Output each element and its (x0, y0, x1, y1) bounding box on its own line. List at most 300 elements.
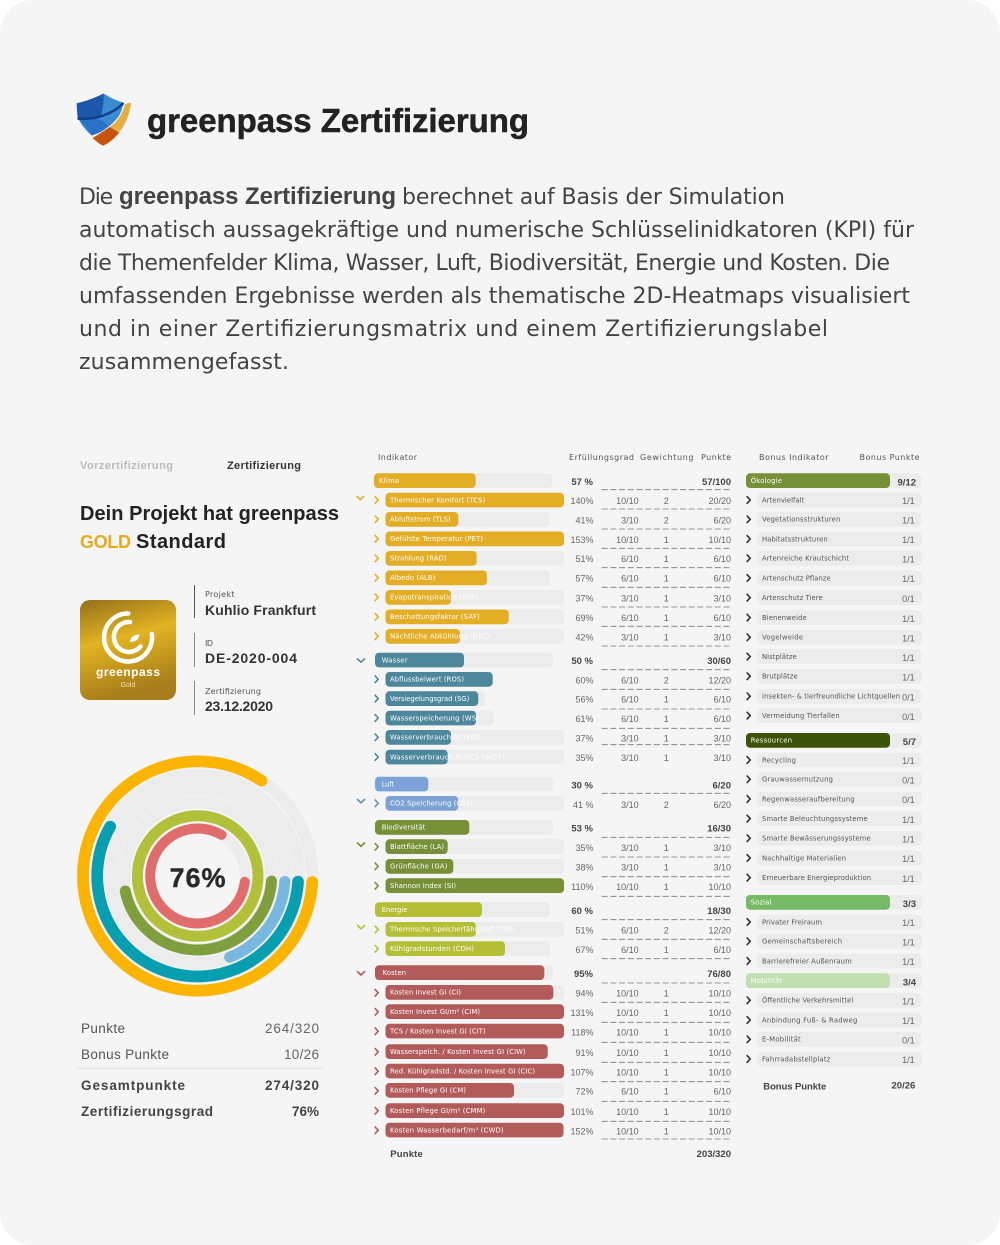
row: WS: Wasserspeicherung (WS) (390, 714, 479, 722)
bonus row: Fahrradabstellplatz: 1/1 (902, 1055, 915, 1065)
row: CI: Kosten Invest GI (CI) (390, 989, 461, 997)
bonus row: Privater Freiraum (747, 915, 922, 929)
bonus row: Artenvielfalt: 1/1 (902, 496, 915, 506)
row: RAD (375, 551, 731, 568)
row: SAF: 1 (664, 613, 669, 623)
row: CDH: 6/10 (713, 945, 731, 955)
bonus row: Smarte Beleuchtungssysteme: 1/1 (902, 815, 915, 825)
bonus row: Nachhaltige Materialien (747, 851, 922, 865)
bonus row: Privater Freiraum: Privater Freiraum (762, 918, 822, 926)
title: greenpass Zertifizierung (147, 102, 529, 139)
row: CI: 10/10 (616, 988, 639, 998)
total: Punkte: Punkte (390, 1149, 423, 1160)
bonus row: Habitatsstrukturen (747, 532, 922, 546)
bonus row: Erneuerbare Energieproduktion (747, 870, 922, 885)
table header: main: Erfüllungsgrad (569, 453, 634, 462)
row: CWD: 10/10 (616, 1126, 639, 1136)
intro text block (79, 183, 915, 375)
summary: Gesamtpunkte: 274/320 (265, 1078, 319, 1093)
table header: bonus: Bonus Punkte (860, 453, 920, 462)
bonus row: Vegetationsstrukturen: Vegetationsstrukturen (762, 516, 840, 524)
group: Kosten (357, 965, 731, 983)
group: Biodiversität: 16/30 (707, 824, 731, 834)
row: GA: 1 (664, 863, 669, 873)
row: CSS: CO2 Speicherung (CSS) (390, 800, 473, 808)
bonus group: Ökologie: Ökologie (751, 476, 782, 485)
row: WD: 3/10 (713, 733, 731, 743)
row: CIW: 10/10 (708, 1048, 731, 1058)
row: LA: 35% (575, 843, 594, 853)
row: NTC: Nächtliche Abkühlung (NTC) (390, 633, 490, 641)
row: ROS (375, 672, 731, 689)
row: CMM: 10/10 (708, 1107, 731, 1117)
bonus row: Artenreiche Krautschicht: Artenreiche Krautschicht (762, 555, 849, 563)
intro text block: die Themenfelder Klima, Wasser, Luft, Biodiversität, Energie und Kosten. Die (79, 251, 890, 276)
row: EVA: 37% (575, 593, 594, 603)
bonus row: E-Mobilität (747, 1032, 922, 1047)
row: SG: 1 (664, 695, 669, 705)
bonus row: Gemeinschaftsbereich (747, 934, 922, 949)
project info: Zertifizierung: Zertifizierung (205, 687, 261, 696)
row: PET: 10/10 (616, 535, 639, 545)
row: SI: 10/10 (708, 882, 731, 892)
bonus group: Sozial (746, 895, 922, 910)
table header: main (378, 453, 731, 462)
bonus row: Artenreiche Krautschicht (747, 551, 922, 566)
row: SAF (375, 610, 731, 626)
bonus row: Anbindung Fuß- & Radweg: Anbindung Fuß- & Radweg (762, 1016, 857, 1024)
summary: Punkte: 264/320 (265, 1021, 319, 1036)
bonus row: Vogelweide: Vogelweide (762, 634, 803, 642)
row: PET: 1 (664, 535, 669, 545)
row: WS (375, 711, 731, 728)
bonus row: Fahrradabstellplatz (747, 1052, 922, 1066)
bonus group: Ressourcen (746, 733, 922, 748)
row: CMM: 1 (664, 1107, 669, 1117)
row: CIC: Red. Kühlgradstd. / Kosten Invest GI (CIC) (390, 1067, 535, 1075)
row: TCS: 10/10 (616, 496, 639, 506)
row: EVA (375, 590, 731, 607)
table header: main: Indikator (378, 453, 418, 462)
row: CDH: 1 (664, 945, 669, 955)
row: SG: 6/10 (713, 695, 731, 705)
row: TSS: 2 (664, 926, 669, 936)
row: LA: 3/10 (713, 843, 731, 853)
row: TCS: 140% (570, 496, 594, 506)
group: Biodiversität: Biodiversität (382, 824, 426, 832)
row: TSS (357, 922, 731, 939)
summary: Zertifizierungsgrad: Zertifizierungsgrad (81, 1104, 213, 1119)
bonus row: Nachhaltige Materialien: Nachhaltige Materialien (762, 854, 846, 862)
bonus row: Barrierefreier Außenraum: 1/1 (902, 957, 915, 967)
summary: Zertifizierungsgrad (81, 1104, 319, 1119)
row: RAD: Strahlung (RAD) (390, 555, 447, 563)
row: WS: 1 (664, 714, 669, 724)
row: WD: 3/10 (621, 733, 639, 743)
bonus row: Regenwasseraufbereitung: Regenwasseraufbereitung (762, 795, 855, 803)
intro text block: greenpass Zertifizierung (119, 183, 396, 210)
row: EVA: 1 (664, 593, 669, 603)
row: CIT: TCS / Kosten Invest GI (CIT) (389, 1027, 486, 1035)
bonus row: Privater Freiraum: 1/1 (902, 918, 915, 928)
tabs (80, 460, 301, 472)
row: TCS: 20/20 (708, 496, 731, 506)
summary: Gesamtpunkte (81, 1078, 319, 1093)
project info: Zertifizierung: 23.12.2020 (205, 698, 273, 714)
row: ALB (375, 570, 731, 587)
group: Luft (375, 777, 731, 793)
bonus row: Artenschutz Pflanze: 1/1 (902, 574, 915, 584)
bonus row: Brutplätze: Brutplätze (762, 673, 798, 681)
summary: Bonus Punkte: 10/26 (284, 1047, 319, 1062)
row: GA: Grünfläche (GA) (390, 863, 448, 871)
row: PET: 153% (570, 535, 594, 545)
row: TLS: 41% (575, 516, 594, 526)
badge: greenpass gold: greenpass (96, 665, 160, 679)
row: PET (375, 532, 731, 548)
bonus row: Lichtquellen: Insekten- & tierfreundliche Lichtquellen (762, 693, 900, 701)
row: RAD: 6/10 (713, 554, 731, 564)
group: Kosten: Kosten (383, 969, 406, 977)
bonus row: Fahrradabstellplatz: Fahrradabstellplatz (762, 1055, 831, 1063)
row: WD (375, 730, 731, 745)
row: CIC: 10/10 (708, 1067, 731, 1077)
row: SAF: 6/10 (713, 613, 731, 623)
row: SAF: Beschattungsfaktor (SAF) (390, 613, 480, 621)
row: CSS (357, 796, 731, 811)
group: Klima: 57/100 (702, 477, 731, 488)
row: SG: 6/10 (621, 695, 639, 705)
row: PET: Gefühlte Temperatur (PET) (390, 535, 483, 543)
bonus row: Recycling: 1/1 (902, 756, 915, 766)
bonus group: Ressourcen: 5/7 (903, 737, 916, 748)
row: ALB: 57% (575, 574, 594, 584)
row: SG: 56% (575, 695, 594, 705)
row: ALB: 6/10 (713, 574, 731, 584)
row: RAD: 6/10 (621, 554, 639, 564)
row: CIT: 1 (664, 1028, 669, 1038)
project info: Zertifizierung (194, 681, 273, 715)
row: CWD: 1 (664, 1126, 669, 1136)
bonus row: Vogelweide (747, 630, 922, 645)
total: Bonus Punkte: 20/26 (892, 1080, 915, 1092)
badge: greenpass gold (80, 600, 176, 700)
summary: Bonus Punkte: Bonus Punkte (81, 1047, 169, 1062)
row: WD: Wasserverbrauch GI (WD) (390, 734, 481, 742)
row: TLS (375, 512, 731, 529)
bonus row: Erneuerbare Energieproduktion: 1/1 (902, 874, 915, 884)
bonus row: Artenvielfalt (747, 493, 922, 507)
row: EVA: 3/10 (621, 593, 639, 603)
row: CIT: 10/10 (616, 1028, 639, 1038)
row: GA: 3/10 (713, 863, 731, 873)
intro text block: umfassenden Ergebnisse werden als thematische 2D-Heatmaps visualisiert (79, 284, 910, 309)
row: SI: 110% (571, 882, 594, 892)
bonus row: Öffentliche Verkehrsmittel (747, 993, 922, 1008)
bonus row: Artenreiche Krautschicht: 1/1 (902, 554, 915, 564)
bonus group: Ökologie: 9/12 (898, 478, 916, 488)
row: PET: 10/10 (708, 535, 731, 545)
row: WS: 61% (575, 714, 594, 724)
bonus row: Artenschutz Pflanze: Artenschutz Pflanze (762, 574, 831, 582)
row: GA: 38% (575, 863, 594, 873)
row: SG: Versiegelungsgrad (SG) (390, 695, 470, 703)
row: CIT (375, 1024, 731, 1042)
bonus row: Nistplätze: 1/1 (902, 653, 915, 663)
row: WDT: 1 (664, 753, 669, 763)
row: ALB: 6/10 (621, 574, 639, 584)
bonus group: Mobilität: 3/4 (903, 978, 917, 988)
row: WD: 1 (664, 733, 669, 743)
group: Luft: 30 % (571, 780, 594, 791)
group: Klima (356, 473, 731, 500)
row: ROS: 60% (575, 675, 594, 685)
group: Biodiversität: 53 % (571, 824, 594, 834)
group: Luft: 6/20 (712, 780, 731, 791)
bonus row: Gemeinschaftsbereich: Gemeinschaftsbereich (762, 938, 842, 946)
group: Energie: Energie (382, 906, 407, 914)
bonus row: Nistplätze: Nistplätze (762, 653, 797, 661)
row: CM (375, 1083, 731, 1101)
row: LA: Blattfläche (LA) (390, 843, 444, 851)
row: CMM: 101% (570, 1107, 594, 1117)
row: CDH: Kühlgradstunden (CDH) (390, 945, 474, 953)
intro text block: und in einer Zertifizierungsmatrix und einem Zertifizierungslabel (79, 317, 828, 342)
bonus row: Gemeinschaftsbereich: 1/1 (902, 938, 915, 948)
row: WS: 6/10 (621, 714, 639, 724)
row: CIW (375, 1044, 731, 1062)
row: CWD: 152% (570, 1126, 594, 1136)
row: CIC: 10/10 (616, 1067, 639, 1077)
row: TSS: 12/20 (708, 926, 731, 936)
row: CIM: 1 (664, 1008, 669, 1018)
group: Wasser: 30/60 (707, 656, 731, 667)
bonus row: Anbindung Fuß- & Radweg: 1/1 (902, 1016, 915, 1026)
project info: Projekt: Kuhlio Frankfurt (205, 602, 316, 618)
row: CM: 6/10 (621, 1087, 639, 1097)
summary: Punkte: Punkte (81, 1021, 125, 1036)
total: Punkte: 203/320 (697, 1149, 731, 1160)
row: TLS: 6/20 (713, 516, 731, 526)
bonus row: Smarte Bewässerungssysteme: Smarte Bewässerungssysteme (762, 835, 871, 843)
row: TSS: 6/10 (621, 926, 639, 936)
row: CI: 1 (664, 988, 669, 998)
row: ROS: Abflussbeiwert (ROS) (390, 676, 464, 684)
bonus row: Öffentliche Verkehrsmittel: 1/1 (902, 996, 915, 1006)
row: LA: 3/10 (621, 843, 639, 853)
row: NTC: 3/10 (713, 632, 731, 642)
row: CWD (375, 1123, 731, 1139)
group: Energie (375, 902, 731, 920)
row: CIW: Wasserspeich. / Kosten Invest GI (CIW) (390, 1048, 526, 1056)
heading: project standard (80, 503, 339, 553)
summary: Gesamtpunkte: Gesamtpunkte (81, 1078, 185, 1093)
bonus row: Brutplätze: 1/1 (902, 672, 915, 682)
table header: main: Punkte (701, 453, 731, 462)
bonus row: Lichtquellen (747, 689, 922, 704)
bonus group: Ressourcen: Ressourcen (751, 737, 792, 745)
row: CIM: 10/10 (616, 1008, 639, 1018)
row: SI: Shannon Index (SI) (390, 882, 456, 890)
bonus row: Barrierefreier Außenraum (747, 954, 922, 968)
row: CIW: 91% (575, 1048, 594, 1058)
bonus row: Artenschutz Tiere: 0/1 (902, 594, 915, 604)
row: WDT: Wasserverbrauch GI/TCS (WDT) (390, 753, 505, 761)
icon: greenpass shield logo (77, 94, 131, 146)
group: Wasser: Wasser (382, 656, 408, 664)
project info: Projekt: Projekt (205, 590, 234, 599)
bonus row: Artenschutz Pflanze (747, 571, 922, 585)
bonus row: Vermeidung Tierfallen: Vermeidung Tierfallen (762, 712, 840, 720)
row: TCS: Thermischer Komfort (TCS) (389, 496, 486, 504)
row: SAF: 69% (575, 613, 594, 623)
row: NTC: 3/10 (621, 632, 639, 642)
intro text block: Die (79, 185, 119, 210)
bonus row: Barrierefreier Außenraum: Barrierefreier Außenraum (762, 957, 852, 965)
bonus group: Ökologie (746, 473, 922, 488)
bonus row: Vegetationsstrukturen (747, 512, 922, 527)
table header: bonus (759, 453, 920, 462)
row: GA (375, 859, 731, 877)
row: SI: 10/10 (616, 882, 639, 892)
row: TCS: 2 (664, 496, 669, 506)
badge: greenpass gold: Gold (121, 682, 135, 689)
bonus row: Smarte Bewässerungssysteme: 1/1 (902, 834, 915, 844)
bonus group: Sozial: 3/3 (903, 899, 916, 910)
row: WDT: 3/10 (621, 753, 639, 763)
bonus row: Smarte Beleuchtungssysteme (747, 811, 922, 826)
row: RAD: 51% (575, 554, 594, 564)
row: CIC: 1 (664, 1067, 669, 1077)
row: CIW: 1 (664, 1048, 669, 1058)
row: EVA: 3/10 (713, 593, 731, 603)
group: Biodiversität (375, 820, 731, 837)
group: Energie: 18/30 (707, 906, 731, 917)
row: TLS: 3/10 (621, 516, 639, 526)
row: CSS: 3/10 (621, 800, 639, 810)
row: CIT: 118% (571, 1028, 594, 1038)
heading: project standard: GOLD (80, 532, 131, 552)
bonus row: Grauwassernutzung (747, 772, 922, 787)
project info: ID (194, 633, 297, 667)
bonus group: Mobilität: Mobilität (751, 977, 782, 985)
row: CI: 94% (575, 988, 594, 998)
bonus row: E-Mobilität: 0/1 (902, 1036, 915, 1046)
bonus row: Regenwasseraufbereitung (747, 792, 922, 806)
row: TCS (375, 493, 731, 509)
bonus row: Grauwassernutzung: 0/1 (902, 776, 915, 786)
row: WS: 6/10 (713, 714, 731, 724)
row: TLS: 2 (664, 516, 669, 526)
row: CDH: 6/10 (621, 945, 639, 955)
row: CMM: 10/10 (616, 1107, 639, 1117)
total: Bonus Punkte (763, 1080, 915, 1092)
row: SAF: 6/10 (621, 613, 639, 623)
bonus group: Sozial: Sozial (751, 899, 772, 907)
row: WDT: 35% (575, 753, 594, 763)
row: CIM (375, 1004, 731, 1022)
bonus row: Artenschutz Tiere: Artenschutz Tiere (762, 594, 823, 602)
bonus row: Regenwasseraufbereitung: 0/1 (902, 795, 915, 805)
bonus row: Nistplätze (747, 649, 922, 664)
bonus row: Anbindung Fuß- & Radweg (747, 1013, 922, 1027)
bonus row: Recycling (747, 753, 922, 767)
row: ALB: 1 (664, 574, 669, 584)
bonus row: Bienenweide (747, 610, 922, 625)
row: CMM: Kosten Pflege GI/m² (CMM) (390, 1107, 486, 1115)
table header: main: Gewichtung (640, 453, 694, 462)
bonus row: Grauwassernutzung: Grauwassernutzung (762, 776, 833, 784)
group: Wasser: 50 % (571, 656, 594, 667)
total: Bonus Punkte: Bonus Punkte (763, 1082, 826, 1092)
row: CIC: 107% (570, 1067, 594, 1077)
bonus row: Öffentliche Verkehrsmittel: Öffentliche Verkehrsmittel (762, 996, 853, 1005)
bonus row: Vogelweide: 1/1 (902, 633, 915, 643)
bonus row: Brutplätze (747, 669, 922, 684)
bonus row: Vermeidung Tierfallen (747, 708, 922, 723)
row: ROS: 12/20 (708, 675, 731, 685)
row: CSS: 41 % (573, 800, 594, 810)
row: ROS: 6/10 (621, 675, 639, 685)
row: LA (357, 839, 731, 857)
group: Energie: 60 % (571, 906, 594, 917)
group: Klima: Klima (379, 477, 399, 485)
row: WDT: 3/10 (713, 753, 731, 763)
project info: ID: ID (205, 639, 213, 648)
row: TLS: Abluftstrom (TLS) (390, 516, 451, 524)
row: CIW: 10/10 (616, 1048, 639, 1058)
row: EVA: Evapotranspiration (EVA) (390, 594, 479, 602)
row: CSS: 6/20 (713, 800, 731, 810)
row: CMM (375, 1103, 731, 1121)
row: CWD: 10/10 (708, 1126, 731, 1136)
row: CSS: 2 (664, 800, 669, 810)
bonus row: Lichtquellen: 0/1 (902, 693, 915, 703)
row: CIC (375, 1064, 731, 1082)
radial chart: 76% (77, 755, 318, 997)
row: CM: 6/10 (713, 1087, 731, 1097)
row: CI: 10/10 (708, 988, 731, 998)
row: CIM: 10/10 (708, 1008, 731, 1018)
radial chart value: 76% (170, 863, 226, 893)
group: Kosten: 95% (574, 969, 594, 980)
bonus row: Erneuerbare Energieproduktion: Erneuerbare Energieproduktion (762, 874, 871, 882)
bonus row: Recycling: Recycling (762, 756, 796, 764)
row: TSS: 51% (575, 926, 594, 936)
bonus row: Bienenweide: 1/1 (902, 614, 915, 624)
bonus row: Habitatsstrukturen: Habitatsstrukturen (762, 535, 828, 543)
bonus row: Vermeidung Tierfallen: 0/1 (902, 712, 915, 722)
summary: Bonus Punkte (81, 1047, 319, 1062)
row: CWD: Kosten Wasserbedarf/m³ (CWD) (390, 1126, 504, 1134)
row: RAD: 1 (664, 554, 669, 564)
bonus row: Artenschutz Tiere (747, 590, 922, 605)
total: Punkte (390, 1149, 731, 1160)
row: CI (375, 985, 731, 1002)
row: ROS: 2 (664, 675, 669, 685)
row: SG (375, 691, 731, 709)
row: SI: 1 (664, 882, 669, 892)
row: NTC (375, 629, 731, 646)
heading: project standard: Dein Projekt hat greenpass (80, 503, 339, 525)
group: Kosten: 76/80 (707, 969, 731, 980)
intro text block: zusammengefasst. (79, 350, 289, 375)
summary: Punkte (81, 1021, 319, 1036)
group: Luft: Luft (382, 780, 394, 788)
project info: ID: DE-2020-004 (205, 650, 297, 666)
bonus row: Nachhaltige Materialien: 1/1 (902, 854, 915, 864)
row: WD: 37% (575, 733, 594, 743)
